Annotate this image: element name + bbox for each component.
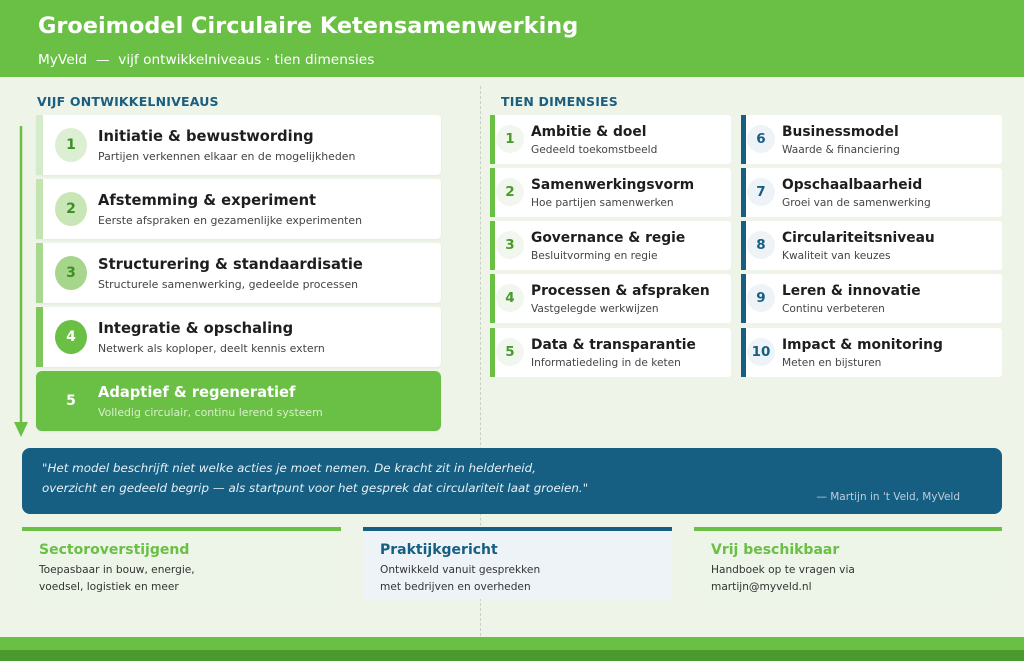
dimension 2: 2 [505, 184, 515, 200]
quote callout [22, 448, 1002, 514]
level 3: 3 [66, 265, 76, 281]
quote callout: "Het model beschrijft niet welke acties je moet nemen. De kracht zit in helderheid, [42, 461, 536, 475]
dimension 7: Groei van de samenwerking [782, 197, 931, 209]
dimension 3: 3 [505, 237, 515, 253]
level 4: 4 [66, 329, 76, 345]
dimension 1: 1 [505, 131, 515, 147]
dimension 9: Continu verbeteren [782, 303, 885, 315]
level 3 [36, 243, 441, 303]
dimension 5 [490, 328, 731, 377]
card: praktijkgericht: met bedrijven en overheden [380, 581, 531, 593]
dimension 8: Kwaliteit van keuzes [782, 250, 891, 262]
divider [480, 86, 481, 636]
dimension 2 [490, 168, 731, 217]
dimension 6: Waarde & financiering [782, 144, 900, 156]
level 4: Netwerk als koploper, deelt kennis extern [98, 342, 325, 355]
card: vrij beschikbaar: Vrij beschikbaar [711, 542, 839, 558]
dimension 5: Data & transparantie [531, 337, 696, 353]
quote callout: — Martijn in 't Veld, MyVeld [816, 491, 960, 503]
dimension 4: Processen & afspraken [531, 283, 710, 299]
card: vrij beschikbaar: Handboek op te vragen via [711, 564, 855, 576]
level 4: Integratie & opschaling [98, 320, 293, 337]
level 4 [36, 307, 441, 367]
dimension 8: Circulariteitsniveau [782, 230, 935, 246]
card: praktijkgericht: Ontwikkeld vanuit gesprekken [380, 564, 540, 576]
dimension 1 [490, 115, 731, 164]
dimension 8 [741, 221, 1002, 270]
dimension 10: Impact & monitoring [782, 337, 943, 353]
dimension 6: 6 [756, 131, 766, 147]
level 5: Volledig circulair, continu lerend systeem [98, 406, 323, 419]
arrow: progression [14, 126, 28, 437]
title: Groeimodel Circulaire Ketensamenwerking [38, 13, 578, 39]
dimension 7 [741, 168, 1002, 217]
dimension 7: 7 [756, 184, 766, 200]
dimension 6 [741, 115, 1002, 164]
dimension 5: 5 [505, 344, 515, 360]
dimension 6: Businessmodel [782, 124, 899, 140]
dimension 7: Opschaalbaarheid [782, 177, 922, 193]
level 1 [36, 115, 441, 175]
card: sectoroverstijgend: Sectoroverstijgend [39, 542, 189, 558]
header [0, 0, 1024, 77]
level 1: Partijen verkennen elkaar en de mogelijkheden [98, 150, 355, 163]
level 3: Structurering & standaardisatie [98, 256, 363, 273]
level 5: 5 [66, 393, 76, 409]
footer band [0, 637, 1024, 661]
subtitle: MyVeld — vijf ontwikkelniveaus · tien dimensies [38, 52, 374, 68]
heading: dimensions: TIEN DIMENSIES [501, 94, 618, 109]
level 2: Afstemming & experiment [98, 192, 316, 209]
level 5: Adaptief & regeneratief [98, 384, 295, 401]
card: sectoroverstijgend: voedsel, logistiek en meer [39, 581, 179, 593]
dimension 4 [490, 274, 731, 323]
level 2 [36, 179, 441, 239]
level 5 [36, 371, 441, 431]
dimension 10: 10 [752, 344, 770, 360]
level 2: Eerste afspraken en gezamenlijke experimenten [98, 214, 362, 227]
dimension 4: 4 [505, 290, 515, 306]
dimension 5: Informatiedeling in de keten [531, 357, 681, 369]
dimension 2: Samenwerkingsvorm [531, 177, 694, 193]
dimension 3: Besluitvorming en regie [531, 250, 657, 262]
dimension 2: Hoe partijen samenwerken [531, 197, 674, 209]
card: praktijkgericht: Praktijkgericht [380, 542, 498, 558]
dimension 9: Leren & innovatie [782, 283, 921, 299]
card: vrij beschikbaar [694, 527, 1002, 599]
dimension 1: Gedeeld toekomstbeeld [531, 144, 657, 156]
card: vrij beschikbaar: martijn@myveld.nl [711, 581, 812, 593]
dimension 10: Meten en bijsturen [782, 357, 881, 369]
level 3: Structurele samenwerking, gedeelde processen [98, 278, 358, 291]
level 1: 1 [66, 137, 76, 153]
level 2: 2 [66, 201, 76, 217]
dimension 8: 8 [756, 237, 766, 253]
dimension 3: Governance & regie [531, 230, 685, 246]
dimension 1: Ambitie & doel [531, 124, 646, 140]
heading: levels: VIJF ONTWIKKELNIVEAUS [37, 94, 219, 109]
card: praktijkgericht [363, 527, 672, 599]
card: sectoroverstijgend [22, 527, 341, 599]
card: sectoroverstijgend: Toepasbaar in bouw, energie, [39, 564, 195, 576]
quote callout: overzicht en gedeeld begrip — als startpunt voor het gesprek dat circulariteit laat groeien." [42, 481, 588, 495]
dimension 9: 9 [756, 290, 766, 306]
level 1: Initiatie & bewustwording [98, 128, 314, 145]
dimension 4: Vastgelegde werkwijzen [531, 303, 659, 315]
dimension 10 [741, 328, 1002, 377]
dimension 3 [490, 221, 731, 270]
dimension 9 [741, 274, 1002, 323]
